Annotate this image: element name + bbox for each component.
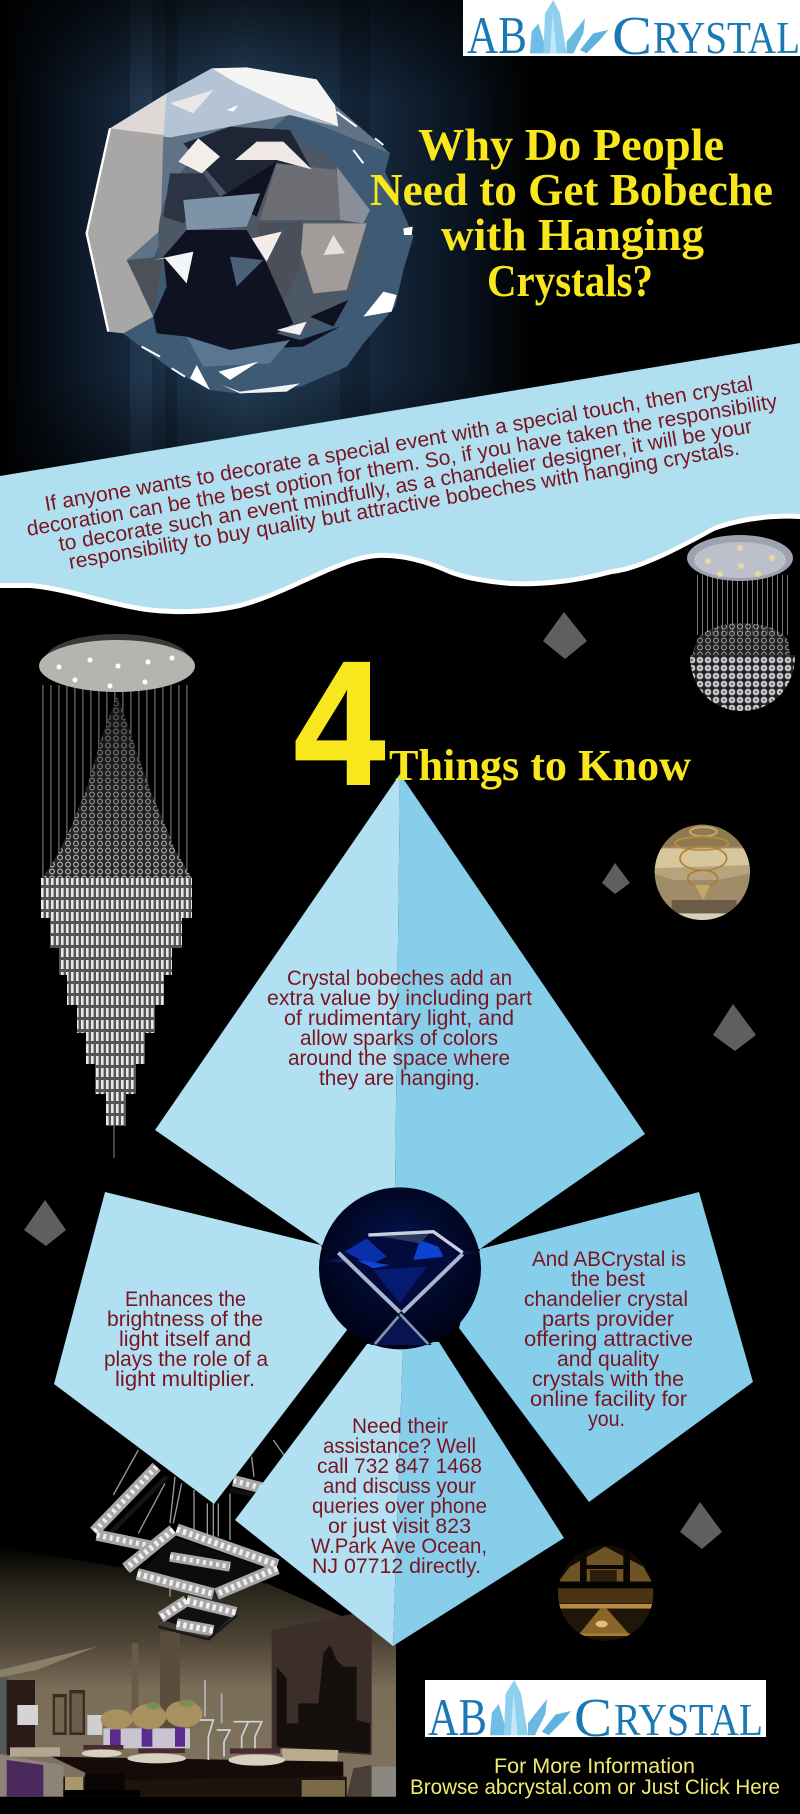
footer text: Browse abcrystal.com or Just Click Here [410,1776,780,1799]
bottom kite text: NJ 07712 directly. [312,1555,481,1578]
intro text: responsibility to buy quality but attractive bobeches with hanging crystals. [67,437,741,574]
bottom kite text [311,1415,487,1578]
bottom kite text: and discuss your [323,1475,476,1498]
top kite text: extra value by including part [267,987,532,1010]
room: curtain [0,1677,38,1755]
bottom kite text: Need their [352,1415,448,1438]
right kite text: And ABCrystal is [532,1248,686,1271]
header glow background [0,0,530,500]
right kite text: the best [571,1268,645,1291]
left kite text: brightness of the [107,1308,263,1331]
bottom kite text: or just visit 823 [328,1515,471,1538]
right kite text: offering attractive [524,1328,693,1351]
room: sofa and chairs [0,1747,396,1797]
bottom kite text: W.Park Ave Ocean, [311,1535,487,1558]
panel: intro band [0,343,800,614]
bottom kite text: call 732 847 1468 [317,1455,482,1478]
bottom logo wordmark C: C [574,1687,612,1748]
title [370,119,773,306]
right kite text: parts provider [542,1308,674,1331]
room: pictures [53,1690,85,1735]
title: with Hanging [441,209,704,260]
panel: top kite [155,774,645,1270]
bottom kite text: queries over phone [312,1495,487,1518]
right kite text: crystals with the [532,1368,684,1391]
left kite text: plays the role of a [104,1348,268,1371]
bottom logo wordmark RYSTAL: RYSTAL [614,1694,763,1745]
logo: bottom [425,1680,766,1748]
top kite text: they are hanging. [319,1067,480,1090]
heading: number 4: 4 [294,626,385,822]
photo: dining room [0,1547,396,1797]
bottom logo wordmark AB: AB [428,1689,487,1747]
decor: grey diamond 5 [680,1502,722,1549]
left kite text: light multiplier. [115,1368,255,1391]
title: Crystals? [487,255,653,306]
intro text: decoration can be the best option for them. So, if you have taken the responsibility [25,390,779,541]
footer text [410,1755,780,1799]
title: Why Do People [418,119,724,170]
room: table [52,1680,343,1797]
heading: things to know: Things to Know [389,741,691,790]
decor: grey diamond 2 [602,863,630,894]
panel: right kite [459,1192,753,1502]
top kite text: allow sparks of colors [300,1027,498,1050]
left kite text: Enhances the [125,1288,246,1311]
right kite text: and quality [557,1348,659,1371]
bottom kite text: assistance? Well [323,1435,476,1458]
right kite text: you. [588,1408,625,1431]
top kite text: Crystal bobeches add an [287,967,512,990]
icon: central blue diamond [319,1187,481,1349]
chandelier: right ball [687,535,795,711]
chandelier: hanging squares [94,1440,285,1639]
crystal photo [87,67,413,393]
decor: grey diamond 3 [713,1004,756,1051]
logo: top [463,0,800,66]
intro text: to decorate such an event mindfully, as a chandelier designer, it will be your [57,415,754,556]
panel: left kite [54,1192,347,1504]
logo wordmark AB: AB [467,7,527,65]
footer text: For More Information [494,1755,695,1778]
decor: grey diamond 1 [543,612,587,659]
logo crystal icon [530,0,608,53]
right kite text [524,1248,693,1431]
room: city panel [272,1610,372,1755]
top kite text: around the space where [288,1047,510,1070]
intro text: If anyone wants to decorate a special event with a special touch, then crystal [43,372,755,516]
photo: dark gold hall [557,1545,657,1645]
left kite text: light itself and [119,1328,251,1351]
right kite text: chandelier crystal [524,1288,688,1311]
right kite text: online facility for [530,1388,687,1411]
top kite text [267,967,532,1090]
bottom logo crystal icon [490,1680,571,1735]
panel: bottom kite [235,1342,564,1646]
decor: grey diamond 4 [24,1200,66,1246]
room: flowers and vases [101,1700,203,1748]
top kite text: of rudimentary light, and [284,1007,514,1030]
photo: gold spiral chandelier [653,823,753,923]
title: Need to Get Bobeche [370,164,773,215]
logo wordmark C: C [612,5,652,66]
chandelier: left tiered [39,634,195,1158]
left kite text [104,1288,268,1391]
